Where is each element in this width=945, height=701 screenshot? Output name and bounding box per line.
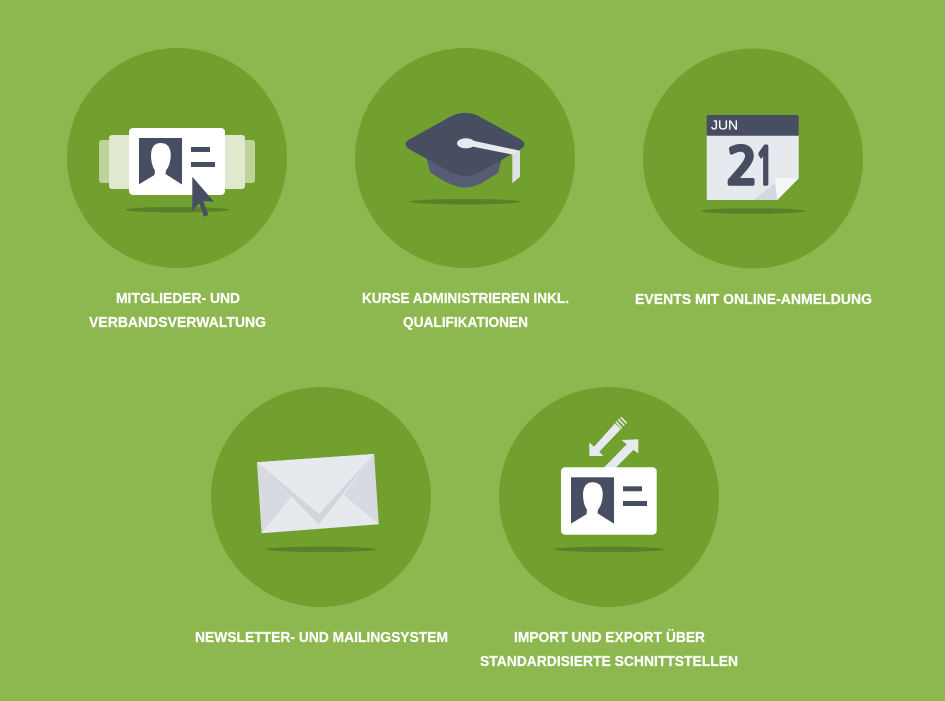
icon shadow [701,208,805,214]
panel: events [635,48,872,308]
icon shadow [410,199,520,204]
icon: calendar: 1 [755,142,775,192]
circle: courses [355,48,575,268]
panel: courses [355,48,575,331]
label: courses: KURSE ADMINISTRIEREN INKL. [362,291,569,307]
label: member management: VERBANDSVERWALTUNG [89,315,266,331]
circle: events [643,48,863,268]
icon shadow [266,546,376,552]
icon: calendar: 2 [726,142,758,192]
icon: calendar [707,115,799,200]
label: member management [89,291,266,331]
label: newsletter: NEWSLETTER- UND MAILINGSYSTEM [195,630,448,646]
label: member management: MITGLIEDER- UND [116,291,240,307]
label: courses: QUALIFIKATIONEN [403,315,528,331]
label: import and export: IMPORT UND EXPORT ÜBER [514,629,706,646]
circle: member management [67,48,287,268]
panel: member management [67,48,287,331]
circle: import and export [499,387,719,607]
icon: ID card [561,467,657,535]
icon shadow [125,207,229,212]
panel: import and export [480,387,738,670]
label: import and export: STANDARDISIERTE SCHNITTSTELLEN [480,654,738,670]
icon shadow [554,546,664,552]
icon: member card carousel with cursor [99,128,255,217]
icon: pencil arrow and export arrow [589,417,638,468]
icon: calendar: JUN [711,118,738,132]
icon: graduation cap [406,113,524,188]
panel: newsletter [195,387,448,646]
label: courses [362,291,569,331]
label: import and export [480,629,738,670]
circle: newsletter [211,387,431,607]
icon: envelope [257,454,379,533]
label: events: EVENTS MIT ONLINE-ANMELDUNG [635,292,872,308]
